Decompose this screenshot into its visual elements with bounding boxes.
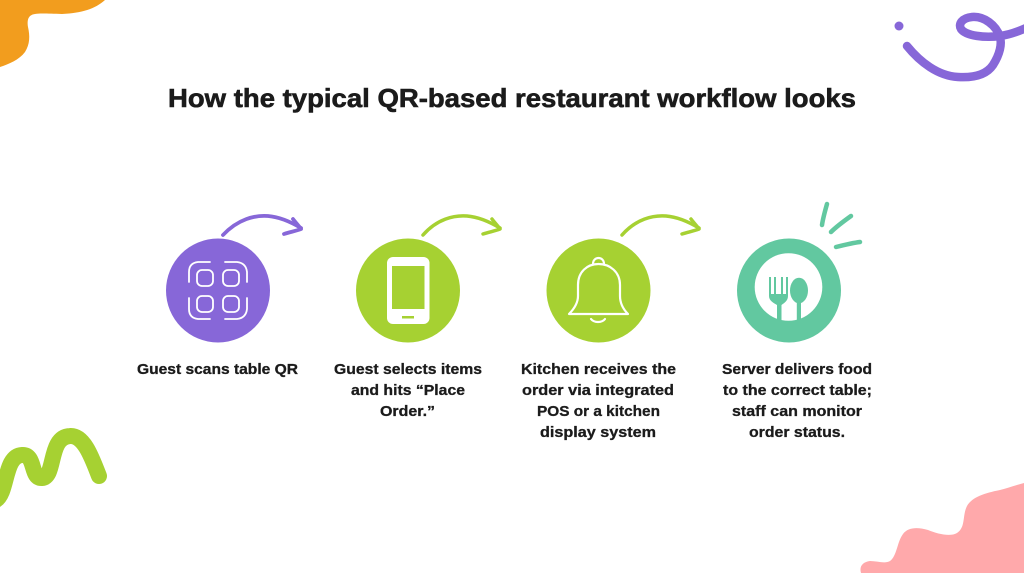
- icon: smartphone: [356, 238, 460, 342]
- decoration: green squiggle bottom left: [0, 436, 99, 500]
- decoration: purple squiggle top right: [894, 17, 1024, 77]
- decoration: pink blob bottom right: [860, 483, 1024, 573]
- title: How the typical QR-based restaurant workflow looks: [168, 83, 856, 113]
- label: step 3: order via integrated: [522, 383, 674, 399]
- step 4: server delivers: [722, 204, 872, 441]
- label: step 4: order status.: [749, 425, 845, 441]
- label: step 1: Guest scans table QR: [137, 362, 299, 378]
- label: step 4: staff can monitor: [732, 404, 862, 420]
- arrow: purple step 1 to 2: [223, 216, 301, 235]
- label: step 2: Guest selects items: [334, 362, 482, 378]
- icon: plate with fork and spoon: [737, 238, 841, 342]
- label: step 3: Kitchen receives the: [521, 362, 676, 378]
- arrow: green step 3 to 4: [622, 216, 699, 235]
- step 1: scan QR: [137, 216, 301, 378]
- label: step 3: display system: [540, 425, 656, 441]
- label: step 4: to the correct table;: [723, 383, 872, 399]
- label: step 2: [334, 362, 482, 420]
- label: step 3: [521, 362, 676, 441]
- icon: bell: [546, 238, 650, 342]
- decoration: orange blob top left: [0, 0, 105, 67]
- label: step 2: and hits “Place: [351, 383, 465, 399]
- icon: sparkle rays: [822, 204, 860, 247]
- step 2: place order: [334, 216, 500, 420]
- label: step 4: Server delivers food: [722, 362, 872, 378]
- label: step 4: [722, 362, 872, 441]
- icon: QR scan: [166, 238, 270, 342]
- label: step 2: Order.”: [380, 404, 435, 420]
- arrow: green step 2 to 3: [423, 216, 500, 235]
- step 3: kitchen receives: [521, 216, 699, 441]
- label: step 3: POS or a kitchen: [537, 404, 660, 420]
